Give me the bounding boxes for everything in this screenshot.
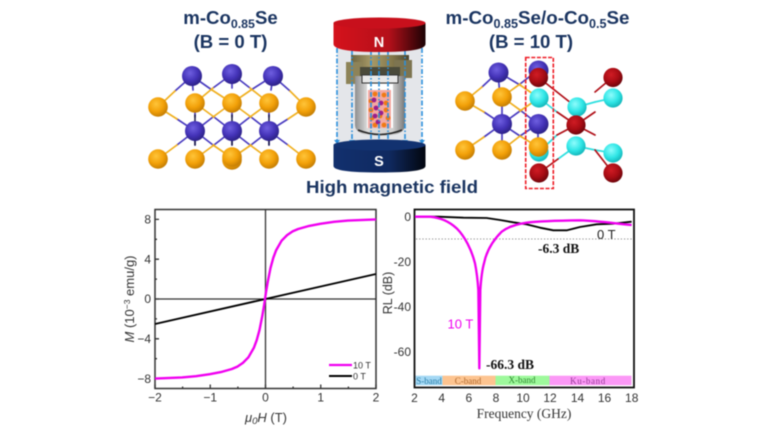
line: 10 T	[155, 219, 376, 379]
x axis tick labels: 4	[438, 391, 445, 405]
legend: 0 T	[353, 372, 366, 382]
x axis tick labels: 10	[516, 391, 530, 405]
y axis tick labels: 4	[144, 252, 151, 266]
title: m-Co0.85Se/o-Co0.5Se (B = 10 T): Se	[606, 7, 629, 28]
title: m-Co0.85Se/o-Co0.5Se (B = 10 T): 0.5	[589, 17, 606, 31]
title: m-Co0.85Se (B = 0 T)	[183, 7, 278, 52]
title: m-Co0.85Se (B = 0 T): 0.85	[231, 17, 255, 31]
x axis tick labels: −2	[148, 390, 162, 404]
crystal structure: m-Co0.85Se/o-Co0.5Se	[455, 58, 623, 188]
chart: magnetization curves	[122, 210, 380, 427]
band strip: S-band	[416, 376, 442, 386]
x axis title: 0	[252, 416, 258, 427]
annotation: 0 T: 0 T	[597, 227, 616, 242]
x axis title: Frequency (GHz)	[477, 406, 571, 421]
y axis title: RL (dB)	[381, 272, 395, 314]
y axis tick labels: -40	[394, 300, 411, 314]
y axis title: M (10	[122, 309, 137, 343]
x axis tick labels: 18	[625, 391, 639, 405]
line: 10 T	[415, 217, 632, 368]
legend: 10 T	[353, 360, 371, 370]
threshold line	[416, 238, 632, 240]
line: 0 T	[415, 217, 632, 230]
annotation: 10 T: 10 T	[448, 316, 473, 332]
title: m-Co0.85Se/o-Co0.5Se (B = 10 T): 0.85	[494, 17, 518, 31]
annotation: -66.3 dB: -66.3 dB	[486, 357, 534, 372]
x axis tick labels: 2	[411, 391, 418, 405]
line: 0 T	[155, 274, 376, 324]
x axis title: μ	[244, 410, 252, 425]
magnet: N pole	[334, 18, 426, 52]
title: m-Co0.85Se (B = 0 T): m-Co	[183, 7, 231, 28]
y axis tick labels: -60	[394, 345, 411, 359]
x axis tick labels: 8	[493, 391, 500, 405]
sample holder	[346, 55, 412, 136]
x axis title: (T)	[270, 410, 287, 425]
field lines	[337, 48, 422, 141]
x axis title: H	[257, 410, 267, 425]
x axis tick labels: 0	[262, 390, 269, 404]
y axis title: −3	[122, 299, 132, 309]
y axis tick labels: −4	[137, 332, 151, 346]
x axis tick labels: −1	[203, 390, 217, 404]
x axis tick labels: 2	[373, 390, 380, 404]
title: m-Co0.85Se/o-Co0.5Se (B = 10 T): Se/o-Co	[518, 7, 589, 28]
band strip	[416, 375, 632, 386]
highlight: dashed box	[526, 58, 553, 188]
magnet: N pole: N	[374, 35, 384, 51]
title: m-Co0.85Se (B = 0 T): (B = 0 T)	[194, 31, 267, 52]
x axis tick labels	[411, 391, 639, 405]
x axis tick labels: 12	[543, 391, 557, 405]
magnet: S pole	[334, 140, 426, 172]
heading: High magnetic field: High magnetic field	[306, 177, 478, 197]
title: m-Co0.85Se/o-Co0.5Se (B = 10 T): (B = 10 T)	[489, 31, 573, 52]
title: m-Co0.85Se/o-Co0.5Se (B = 10 T)	[446, 7, 629, 52]
y axis tick labels: −8	[137, 372, 151, 386]
y axis tick labels	[394, 210, 411, 359]
band strip: X-band	[508, 375, 536, 385]
apparatus: magnet and sample holder	[334, 18, 426, 172]
band strip: Ku-band	[570, 376, 606, 386]
band strip: C-band	[455, 376, 482, 386]
annotation: -6.3 dB: -6.3 dB	[538, 241, 579, 256]
y axis tick labels: 8	[144, 212, 151, 226]
x axis tick labels: 16	[598, 391, 611, 405]
y axis tick labels	[137, 212, 151, 386]
chart: reflection loss	[381, 210, 639, 421]
y axis title: emu/g)	[122, 255, 137, 300]
translucent chamber	[337, 45, 421, 145]
magnet: S pole: S	[374, 154, 384, 170]
y axis tick labels: -20	[394, 255, 411, 269]
title: m-Co0.85Se/o-Co0.5Se (B = 10 T): m-Co	[446, 7, 494, 28]
x axis tick labels: 1	[317, 390, 324, 404]
crystal structure: m-Co0.85Se	[148, 64, 316, 170]
title: m-Co0.85Se (B = 0 T): Se	[255, 7, 278, 28]
y axis tick labels: 0	[404, 210, 411, 224]
legend	[329, 360, 371, 382]
x axis tick labels	[148, 390, 380, 404]
x axis tick labels: 6	[466, 391, 473, 405]
x axis tick labels: 14	[571, 391, 584, 405]
y axis tick labels: 0	[144, 292, 151, 306]
